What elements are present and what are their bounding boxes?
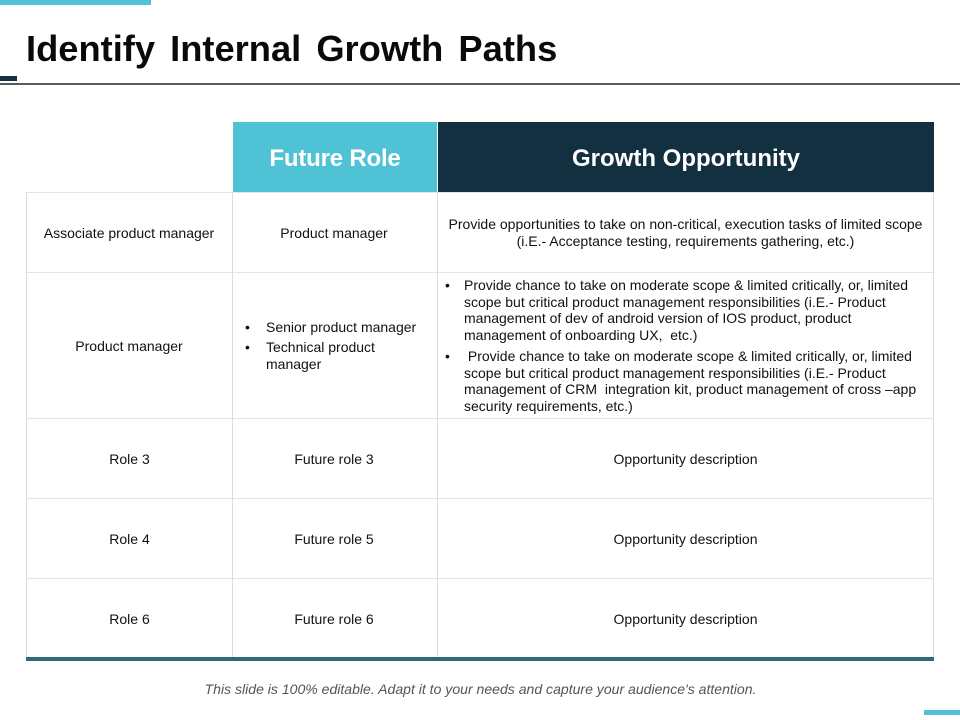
row 2: opportunity list: scope but critical product management responsibilities (i.E.- Product [464, 365, 886, 381]
row 2: opportunity list [445, 277, 916, 414]
bottom right accent bar [924, 710, 960, 715]
row 2: role: Product manager [75, 338, 183, 354]
row 2: opportunity list: Provide chance to take on moderate scope & limited critically, or, limited [464, 277, 908, 293]
row 4: opportunity: Opportunity description [614, 531, 757, 547]
row 1: opportunity: Provide opportunities to take on non-critical, execution tasks of limited scope [449, 216, 922, 232]
title rule [0, 83, 960, 85]
row 2: opportunity list: security requirements, etc.) [464, 398, 633, 414]
table [26, 122, 934, 661]
row 2: opportunity list: • [445, 277, 450, 293]
header: future role [233, 122, 437, 192]
row 4: role: Role 4 [109, 531, 150, 547]
row 2: opportunity list: scope but critical product management responsibilities (i.E.- Product [464, 294, 886, 310]
row 2: future roles list: Senior product manager [266, 319, 416, 335]
row 2: future roles list: manager [266, 356, 321, 372]
row 2: future roles list: • [245, 319, 250, 335]
row 5: opportunity: Opportunity description [614, 611, 757, 627]
table bottom rule [26, 657, 934, 661]
row 1: opportunity [449, 216, 922, 249]
row 2: opportunity list: management of dev of android version of IOS product, product [464, 310, 852, 326]
row 2: future roles list: Technical product [266, 339, 375, 355]
row 5: role: Role 6 [109, 611, 150, 627]
row 5: future role: Future role 6 [294, 611, 374, 627]
header: growth opportunity: Growth Opportunity [572, 145, 800, 172]
row 2: future roles list: • [245, 339, 250, 355]
top accent bar [0, 0, 151, 5]
title: Identify Internal Growth Paths [26, 28, 557, 69]
row 1: role: Associate product manager [44, 225, 214, 241]
footer note: This slide is 100% editable. Adapt it to your needs and capture your audience's attention. [205, 681, 756, 697]
row 2: future roles list [245, 319, 416, 372]
title accent block [0, 76, 17, 81]
row 1: future role: Product manager [280, 225, 388, 241]
row 3: future role: Future role 3 [294, 451, 374, 467]
row 3: opportunity: Opportunity description [614, 451, 757, 467]
header: future role: Future Role [269, 145, 401, 172]
header: growth opportunity [438, 122, 934, 192]
row 2: opportunity list: management of CRM integration kit, product management of cross –app [464, 381, 916, 397]
row 2: opportunity list: • [445, 348, 450, 364]
row 1: opportunity: (i.E.- Acceptance testing, requirements gathering, etc.) [517, 233, 854, 249]
row 2: opportunity list: management of onboarding UX, etc.) [464, 327, 697, 343]
row 2: opportunity list: Provide chance to take on moderate scope & limited critically, or, limited [468, 348, 912, 364]
row 3: role: Role 3 [109, 451, 150, 467]
row 4: future role: Future role 5 [294, 531, 374, 547]
